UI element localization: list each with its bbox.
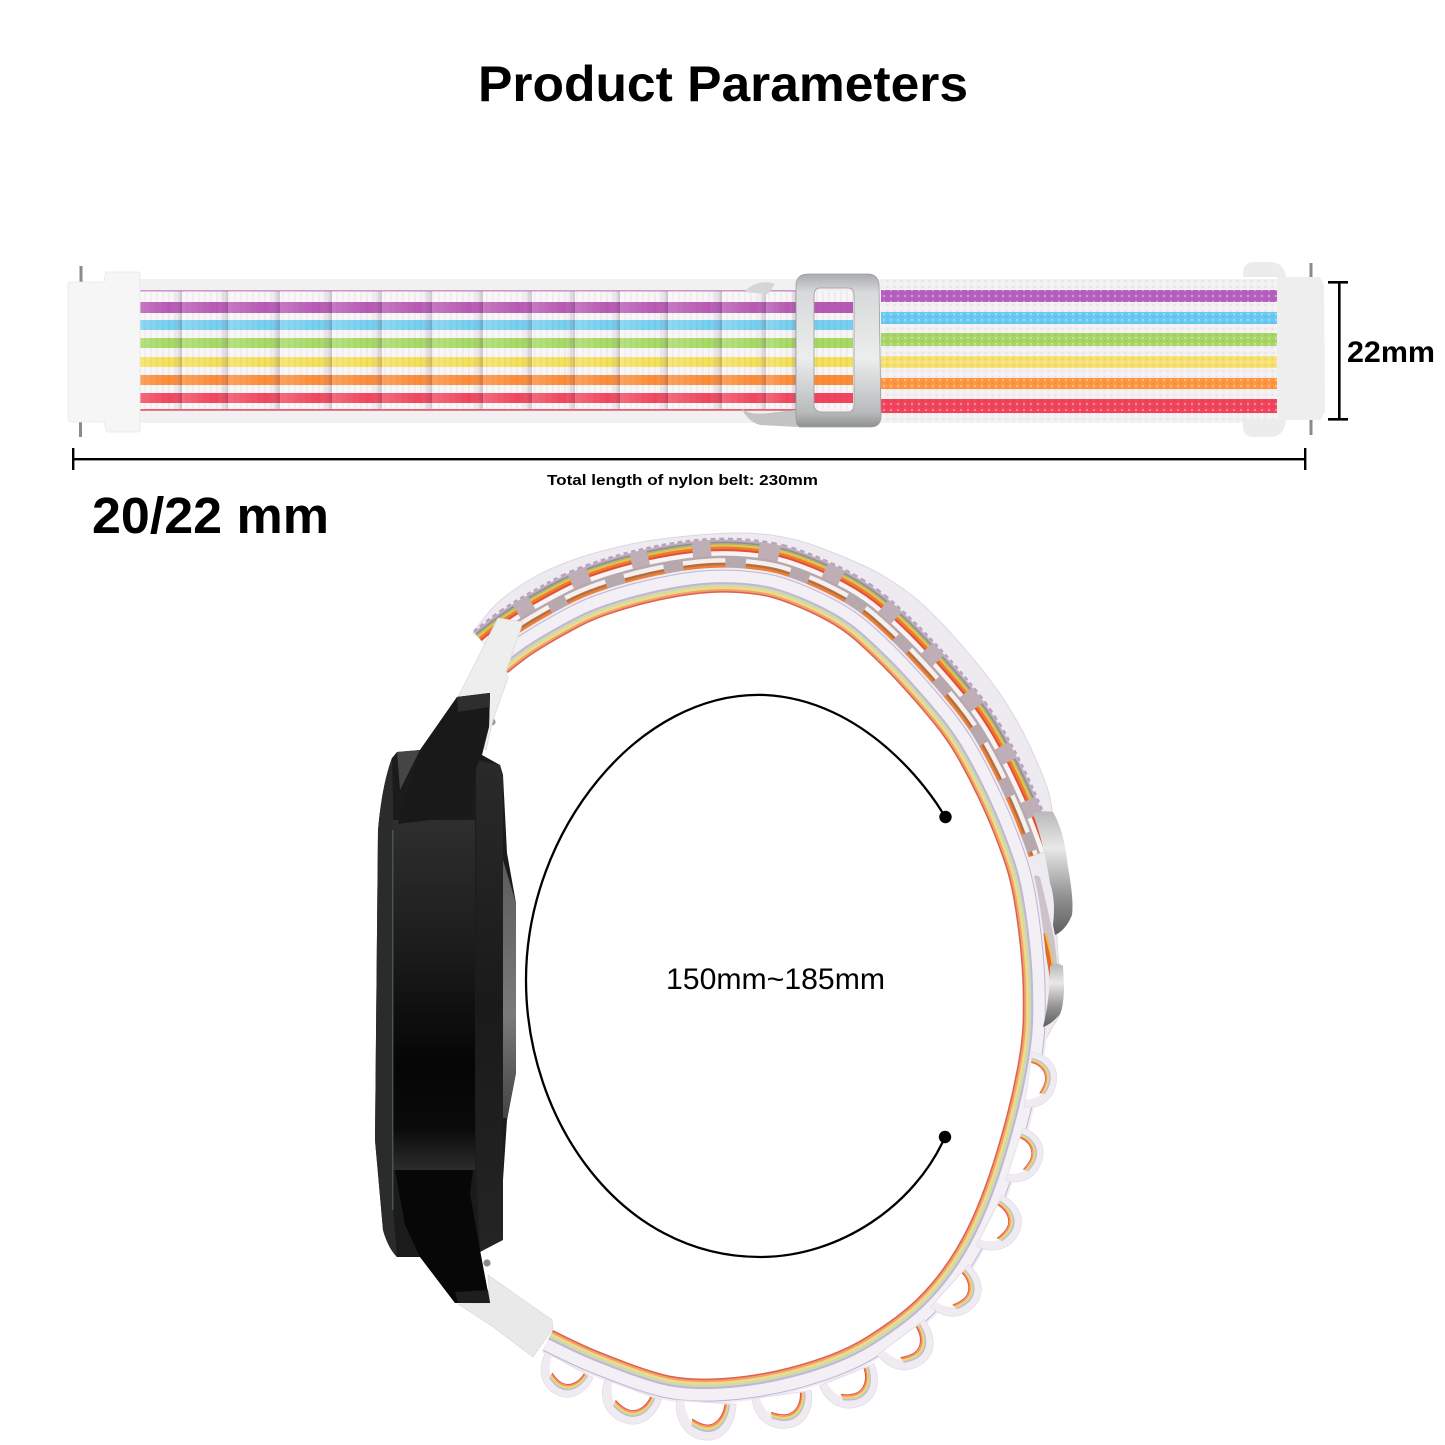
case back highlight [503,860,516,1118]
label: total length: Total length of nylon belt: 230mm [547,472,818,489]
label: strap width: 22mm [1347,336,1435,369]
label: sizes: 20/22 mm [92,487,329,544]
bezel [375,758,397,1257]
large metal buckle [1033,811,1072,935]
lower white connector [458,1275,553,1357]
flat band: rainbow nylon strap with buckle [68,262,1325,437]
loop interior [508,593,1023,1379]
lower lug facet [455,1290,490,1303]
right flat section [881,280,1277,423]
watch silhouette [375,693,516,1303]
right white clip [1243,262,1325,437]
small metal buckle [1043,964,1064,1027]
case back [476,760,503,1252]
upper white connector [458,618,523,750]
curve end dot top [939,811,952,823]
upper lug [398,693,490,824]
watch side view [375,618,553,1357]
fit range curve [526,695,952,1257]
left pleated section [138,290,883,411]
lattice with rainbow openings [508,593,1005,865]
inner band with rainbow edge [508,593,1023,1379]
title: Product Parameters [478,56,968,112]
curved strap loop [473,533,1072,1442]
upper lug side light [397,750,420,790]
curve end dot bottom [939,1131,951,1143]
outer stitching [508,593,1005,865]
strap base [135,279,1280,423]
bezel highlight [392,830,393,1210]
dimension: strap width [1328,281,1348,421]
pins [483,718,496,1267]
upper lug facet [457,693,490,712]
upper strap base [473,533,1062,1052]
main body [393,820,475,1170]
left white clip [68,266,140,437]
metal buckle [741,274,881,427]
label: fit range: 150mm~185mm [666,963,885,996]
lower lattice strips [1036,880,1056,985]
scallops [531,1052,1060,1442]
lower lug [395,1170,490,1303]
dimension: total length [72,448,1306,470]
